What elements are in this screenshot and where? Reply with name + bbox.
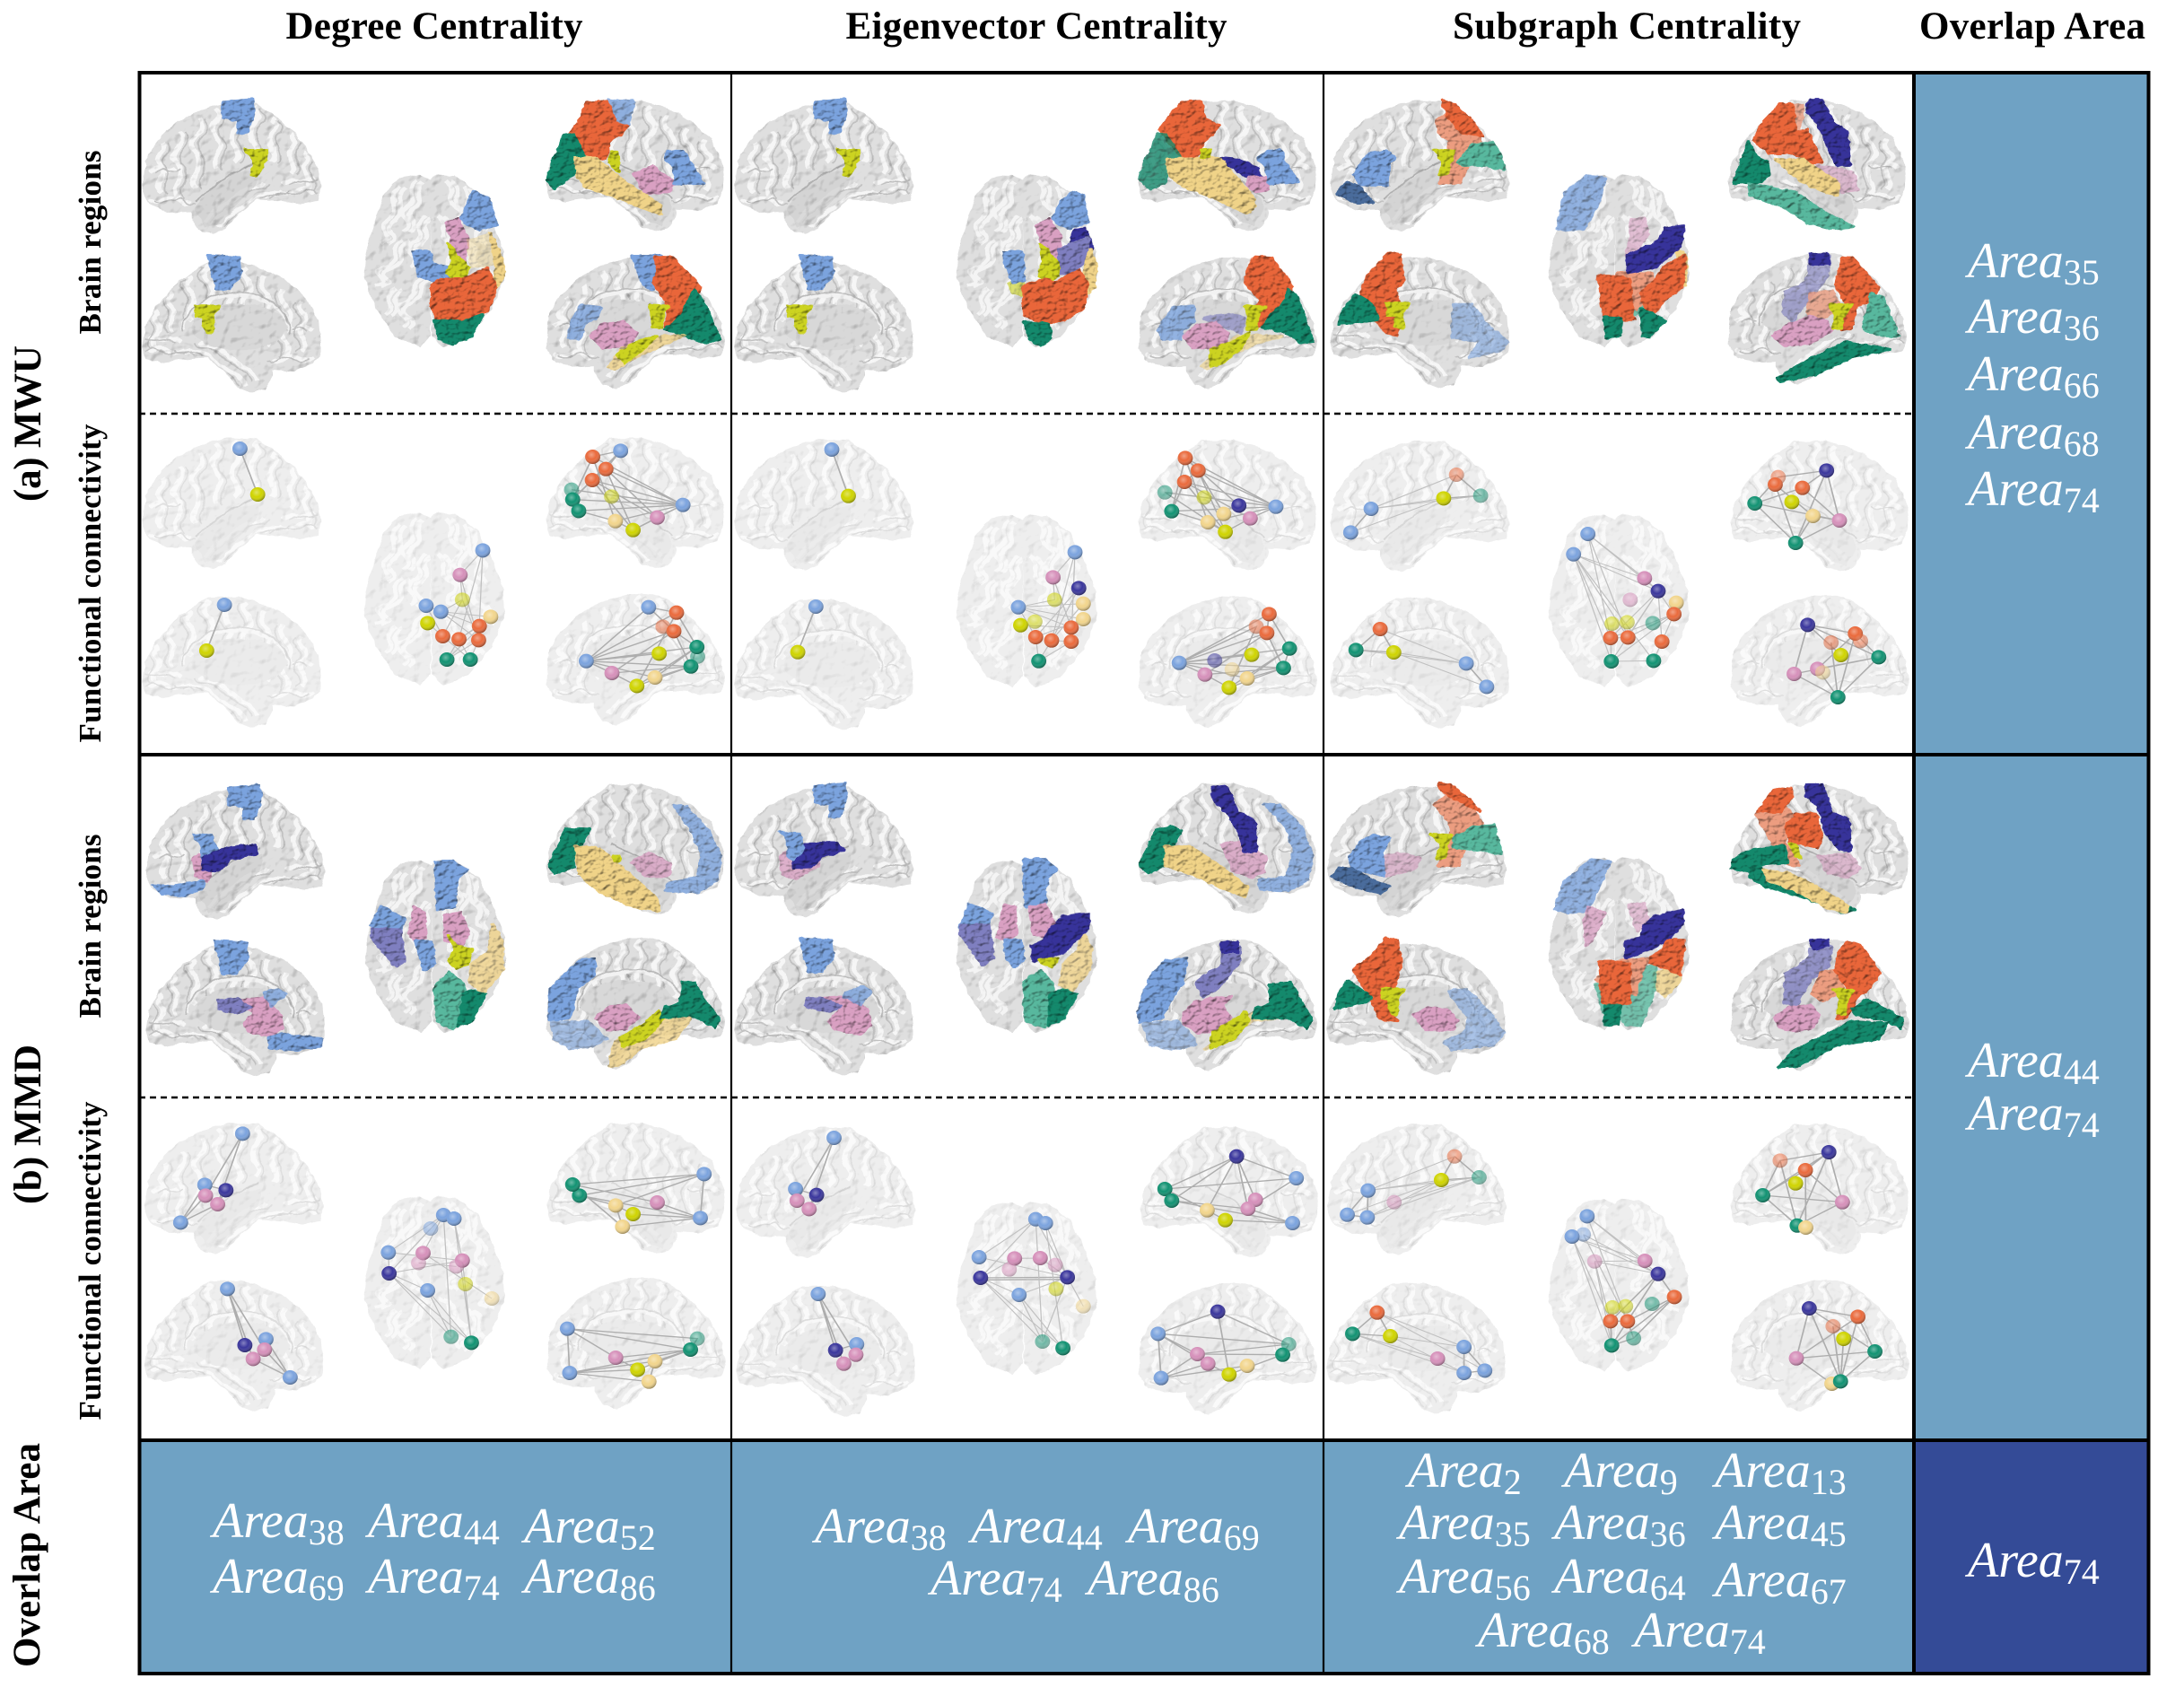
overlap text: degree centrality: 86 — [620, 1568, 656, 1608]
column heading: Eigenvector Centrality: Eigenvector Centrality — [845, 5, 1227, 48]
connectome view: lateral right — [1140, 1128, 1316, 1256]
connectome view: medial left — [737, 1287, 913, 1415]
brain view: lateral left — [737, 99, 913, 232]
overlap text: MWU: Area — [1968, 233, 2064, 289]
overlap text: subgraph centrality: Area — [1554, 1549, 1650, 1604]
overlap text: eigenvector centrality: Area — [815, 1499, 911, 1554]
brain view: top — [366, 861, 504, 1031]
brain view: top — [957, 175, 1096, 345]
overlap text: eigenvector centrality: Area — [930, 1551, 1026, 1606]
overlap text: MMD: Area — [1968, 1086, 2064, 1141]
row heading: (b) MMD: (b) MMD — [7, 1045, 49, 1204]
overlap text: MMD — [1964, 1033, 2100, 1145]
panel: MWU degree brain regions — [143, 99, 724, 391]
overlap text: degree centrality: 38 — [309, 1512, 345, 1552]
row label: Functional connectivity MWU: Functional connectivity — [73, 424, 108, 743]
brain view: lateral right — [546, 785, 722, 914]
overlap panel: MWU — [1914, 73, 2149, 755]
brain view: top — [1549, 175, 1688, 345]
overlap text: subgraph centrality: 67 — [1811, 1571, 1847, 1612]
brain view: top — [364, 175, 503, 345]
overlap text: shared by all: 74 — [2064, 1552, 2100, 1592]
overlap text: degree centrality: Area — [524, 1499, 620, 1554]
overlap text: subgraph centrality: Area — [1634, 1603, 1730, 1658]
overlap text: eigenvector centrality: Area — [1088, 1551, 1184, 1606]
row heading: (a) MWU: (a) MWU — [7, 345, 49, 502]
overlap text: MWU: Area — [1968, 346, 2064, 402]
column heading: Subgraph Centrality: Subgraph Centrality — [1453, 5, 1802, 48]
overlap text: subgraph centrality: 64 — [1650, 1568, 1686, 1608]
overlap text: subgraph centrality: 45 — [1811, 1514, 1847, 1554]
overlap text: subgraph centrality: 35 — [1495, 1514, 1531, 1554]
overlap text: degree centrality: 74 — [464, 1568, 500, 1608]
connectome view: lateral right — [1139, 441, 1315, 570]
brain view: medial left — [1327, 939, 1504, 1073]
overlap text: MWU: 66 — [2064, 365, 2100, 406]
connectome view: lateral right — [1731, 441, 1907, 571]
overlap text: MMD: 44 — [2064, 1052, 2100, 1092]
connectome view: medial left — [1331, 599, 1507, 727]
panel: MMD eigenvector functional connectivity — [737, 1128, 1316, 1415]
brain view: medial right — [547, 256, 724, 388]
brain view: lateral right — [1728, 101, 1904, 230]
connectome view: medial left — [1327, 1284, 1503, 1412]
overlap text: eigenvector centrality: Area — [1128, 1499, 1224, 1554]
panel: MWU eigenvector functional connectivity — [735, 441, 1316, 729]
row label: Functional connectivity MMD: Functional connectivity — [73, 1101, 108, 1420]
overlap text: MWU: 35 — [2064, 252, 2100, 293]
panel: MMD subgraph brain regions — [1327, 783, 1909, 1073]
connectome view: medial left — [143, 598, 319, 726]
connectome view: lateral left — [146, 1124, 323, 1253]
overlap text: subgraph centrality: 36 — [1650, 1514, 1686, 1554]
overlap text: subgraph centrality: Area — [1478, 1603, 1574, 1658]
connectome view: lateral left — [737, 441, 913, 569]
overlap text: MWU: 68 — [2064, 424, 2100, 464]
connectome view: lateral right — [546, 439, 722, 567]
overlap text: MWU: Area — [1968, 405, 2064, 460]
overlap panel: intersection of all — [1914, 1440, 2149, 1674]
connectome view: medial right — [547, 595, 724, 724]
panel: MMD degree functional connectivity — [145, 1124, 724, 1410]
overlap text: MWU — [1964, 233, 2100, 520]
brain view: lateral left — [1330, 783, 1506, 916]
overlap text: degree centrality: Area — [368, 1549, 464, 1604]
overlap text: degree centrality: 69 — [309, 1568, 345, 1608]
overlap text: eigenvector centrality: 74 — [1026, 1569, 1062, 1610]
brain view: lateral left — [148, 785, 324, 918]
connectome view: top — [1549, 515, 1688, 686]
connectome view: top — [364, 513, 503, 684]
overlap text: degree centrality: Area — [524, 1549, 620, 1604]
brain view: medial right — [1729, 254, 1906, 383]
brain view: medial left — [1331, 253, 1507, 387]
overlap text: eigenvector centrality: 86 — [1184, 1569, 1219, 1610]
overlap text: MWU: 74 — [2064, 480, 2100, 520]
connectome view: medial right — [1140, 1284, 1316, 1413]
brain view: top — [1549, 858, 1688, 1028]
overlap text: subgraph centrality: Area — [1715, 1495, 1811, 1551]
connectome view: medial left — [145, 1281, 321, 1410]
connectome view: lateral left — [144, 439, 320, 568]
connectome view: lateral left — [1330, 1125, 1506, 1254]
overlap text: subgraph centrality: 9 — [1660, 1462, 1678, 1502]
overlap text: subgraph centrality: 68 — [1574, 1622, 1610, 1662]
overlap text: subgraph centrality: 2 — [1504, 1462, 1522, 1502]
brain view: top — [957, 860, 1096, 1031]
row heading: Overlap Area: Overlap Area — [6, 1443, 48, 1667]
brain view: medial left — [735, 256, 911, 391]
overlap text: subgraph centrality: Area — [1399, 1549, 1495, 1604]
connectome view: medial right — [1732, 597, 1909, 725]
overlap text: subgraph centrality: 56 — [1495, 1568, 1531, 1608]
overlap text: MWU: Area — [1968, 461, 2064, 517]
overlap text: subgraph centrality: Area — [1399, 1495, 1495, 1551]
connectome view: lateral left — [1332, 442, 1508, 571]
overlap text: degree centrality: 44 — [464, 1512, 500, 1552]
overlap text: degree centrality — [209, 1493, 656, 1608]
brain view: medial left — [735, 939, 911, 1074]
overlap text: subgraph centrality: 13 — [1811, 1462, 1847, 1502]
brain view: medial right — [1732, 940, 1909, 1070]
overlap text: MWU: 36 — [2064, 308, 2100, 348]
column heading: Overlap Area: Overlap Area — [1919, 5, 2145, 48]
connectome view: top — [957, 1202, 1096, 1373]
overlap text: subgraph centrality: Area — [1408, 1443, 1504, 1499]
row label: Brain regions MMD: Brain regions — [73, 835, 108, 1018]
brain view: lateral right — [1139, 784, 1315, 913]
overlap text: eigenvector centrality: 69 — [1224, 1517, 1260, 1558]
connectome view: lateral right — [1731, 1125, 1907, 1254]
brain view: lateral right — [1139, 101, 1315, 231]
connectome view: medial left — [735, 599, 911, 729]
overlap text: MWU: Area — [1968, 289, 2064, 345]
overlap panel: MMD — [1914, 755, 2149, 1440]
connectome view: top — [1549, 1200, 1688, 1369]
brain view: medial left — [146, 940, 323, 1075]
brain view: medial right — [547, 940, 724, 1068]
column heading: Degree Centrality: Degree Centrality — [285, 5, 583, 48]
connectome view: top — [957, 515, 1096, 686]
overlap text: subgraph centrality: Area — [1715, 1443, 1811, 1499]
panel: MWU subgraph functional connectivity — [1331, 441, 1909, 727]
overlap text: eigenvector centrality: Area — [971, 1499, 1067, 1554]
overlap text: subgraph centrality: 74 — [1730, 1622, 1766, 1662]
panel: MWU eigenvector brain regions — [735, 99, 1316, 391]
overlap text: degree centrality: Area — [213, 1549, 309, 1604]
overlap panel: bottom row — [139, 1440, 1914, 1674]
connectome view: lateral left — [738, 1128, 914, 1257]
overlap text: eigenvector centrality: 44 — [1067, 1517, 1103, 1558]
connectome view: medial right — [548, 1279, 724, 1408]
overlap text: degree centrality: 52 — [620, 1517, 656, 1558]
overlap text: subgraph centrality: Area — [1564, 1443, 1660, 1499]
overlap text: eigenvector centrality: 38 — [911, 1517, 947, 1558]
panel: MMD subgraph functional connectivity — [1327, 1125, 1909, 1412]
overlap text: MMD: 74 — [2064, 1105, 2100, 1145]
brain view: medial right — [1140, 258, 1316, 388]
overlap text: shared by all: Area — [1968, 1533, 2064, 1588]
brain view: lateral right — [546, 101, 722, 231]
connectome view: lateral right — [547, 1124, 723, 1253]
brain view: lateral left — [1332, 101, 1508, 231]
panel: MWU subgraph brain regions — [1331, 101, 1906, 387]
overlap text: eigenvector centrality — [811, 1499, 1260, 1610]
overlap text: subgraph centrality: Area — [1554, 1495, 1650, 1551]
panel: MWU degree functional connectivity — [143, 439, 724, 726]
connectome view: top — [364, 1197, 503, 1368]
brain view: medial right — [1139, 940, 1316, 1070]
panel: MMD eigenvector brain regions — [735, 783, 1316, 1074]
overlap text: subgraph centrality — [1395, 1443, 1847, 1662]
panel: MMD degree brain regions — [146, 785, 724, 1075]
overlap text: degree centrality: Area — [213, 1493, 309, 1549]
brain view: lateral left — [737, 783, 913, 916]
overlap text: degree centrality: Area — [368, 1493, 464, 1549]
overlap text: MMD: Area — [1968, 1033, 2064, 1088]
connectome view: medial right — [1732, 1281, 1909, 1410]
row label: Brain regions MWU: Brain regions — [73, 151, 108, 334]
brain view: lateral right — [1731, 784, 1907, 914]
brain view: lateral left — [144, 99, 320, 232]
connectome view: medial right — [1140, 598, 1316, 726]
brain view: medial left — [143, 256, 319, 391]
overlap text: subgraph centrality: Area — [1715, 1552, 1811, 1608]
